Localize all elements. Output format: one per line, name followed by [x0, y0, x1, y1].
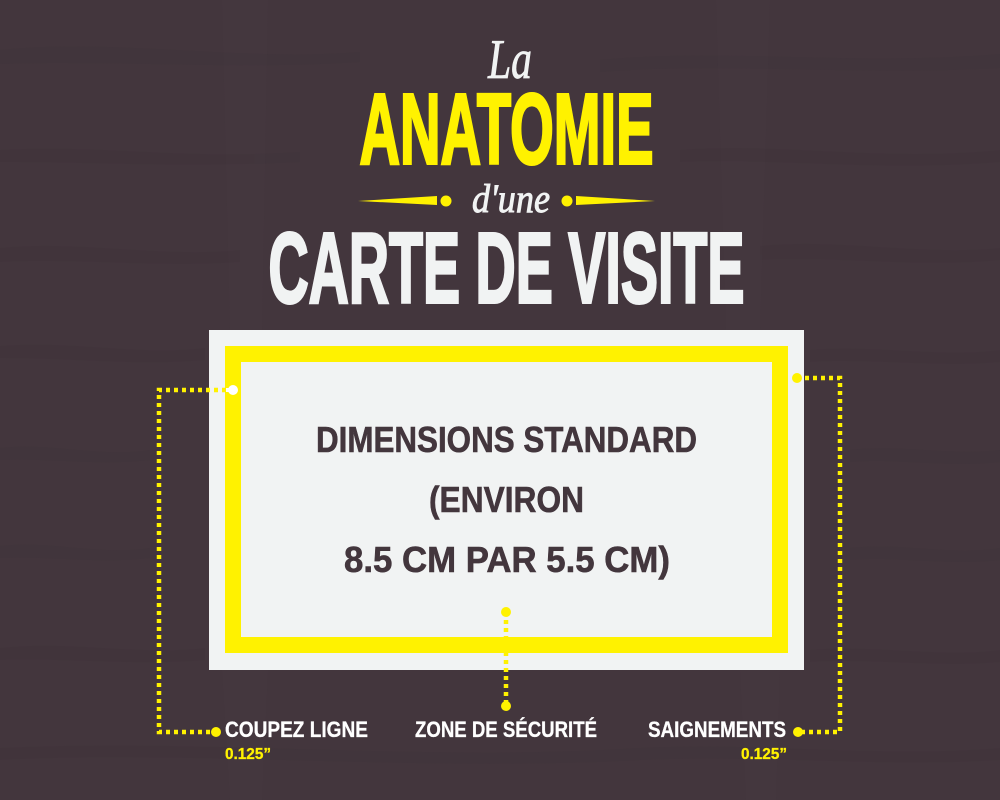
- card outer trim area: [209, 330, 804, 670]
- label: bleed: 0.125”: [741, 746, 787, 763]
- callout: bleed connector: [792, 373, 840, 737]
- card dimensions text: 8.5 CM PAR 5.5 CM): [344, 539, 670, 580]
- title: d'une: d'une: [472, 176, 550, 221]
- panel: business card: [209, 330, 804, 670]
- yellow bleed band: [233, 354, 780, 645]
- ornament: right spike and dot: [562, 196, 655, 206]
- title: La: La: [487, 29, 532, 91]
- card dimensions text: DIMENSIONS STANDARD: [316, 419, 697, 460]
- label: cut line: [225, 717, 368, 763]
- label: safety zone: ZONE DE SÉCURITÉ: [415, 717, 597, 742]
- card dimensions text: [316, 419, 697, 580]
- label: cut line: 0.125”: [225, 746, 271, 763]
- label: bleed: SAIGNEMENTS: [648, 717, 786, 742]
- callout: cut line connector: [159, 385, 238, 737]
- card dimensions text: (ENVIRON: [429, 479, 584, 520]
- label: cut line: COUPEZ LIGNE: [225, 717, 368, 742]
- label: bleed: [648, 717, 787, 763]
- title: [268, 29, 744, 324]
- callout: safety zone connector: [501, 607, 511, 711]
- ornament: left spike and dot: [358, 196, 452, 206]
- title: ANATOMIE: ANATOMIE: [360, 74, 654, 186]
